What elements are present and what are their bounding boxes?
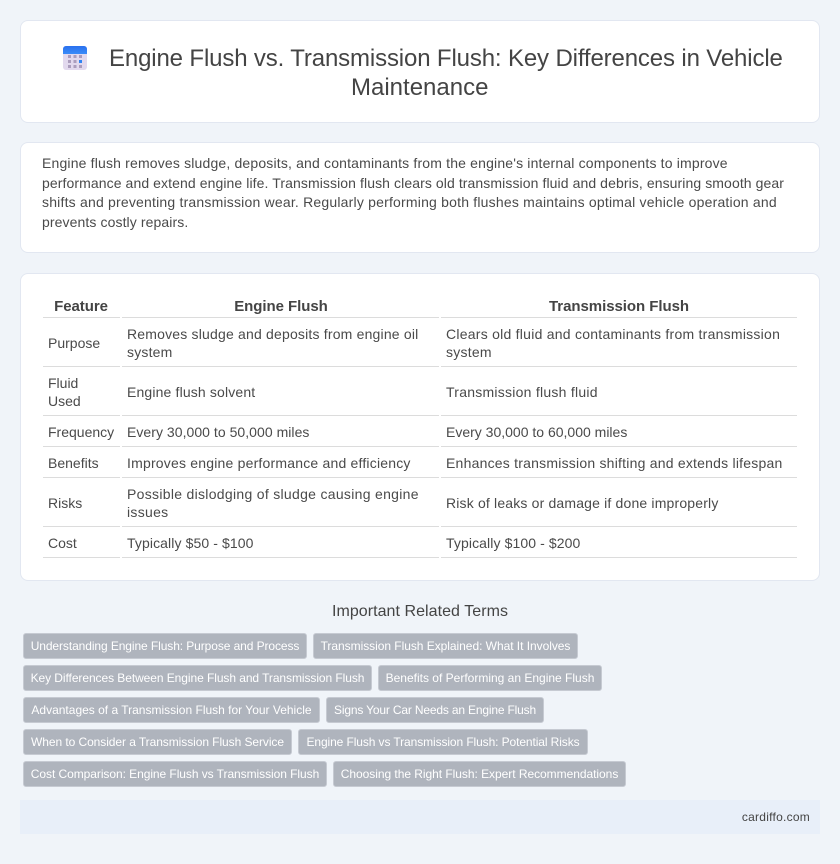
tag <box>333 761 626 787</box>
row: fluid used <box>48 375 598 409</box>
row: benefits: Enhances transmission shifting and extends lifespan <box>446 455 783 471</box>
row: cost <box>48 535 580 551</box>
row: benefits <box>48 455 783 471</box>
panel: comparison table <box>20 273 820 581</box>
tag <box>23 633 307 659</box>
tag <box>23 729 292 755</box>
row: frequency <box>48 424 627 440</box>
tag: Understanding Engine Flush: Purpose and Process <box>31 639 299 653</box>
row: purpose <box>48 326 780 360</box>
row: purpose: Removes sludge and deposits from engine oil <box>127 326 418 342</box>
table header: Transmission Flush <box>549 298 689 315</box>
row: risks: Risks <box>48 495 82 511</box>
tag <box>378 665 602 691</box>
text block: intro: performance and extend engine life. Transmission flush clears old transmission fluid and debris, ensuring smooth gear <box>42 175 784 191</box>
row: purpose: Purpose <box>48 335 100 351</box>
row: purpose: Clears old fluid and contaminants from transmission <box>446 326 780 342</box>
tag <box>326 697 544 723</box>
tag: Key Differences Between Engine Flush and Transmission Flush <box>31 671 364 685</box>
row: frequency: Frequency <box>48 424 114 440</box>
row: cost: Cost <box>48 535 77 551</box>
row: benefits: Benefits <box>48 455 99 471</box>
text block: intro: shifts and preventing transmission wear. Regularly performing both flushes maintains optimal vehicle operation and <box>42 194 777 210</box>
tag: Choosing the Right Flush: Expert Recommendations <box>341 767 618 781</box>
tag: Benefits of Performing an Engine Flush <box>386 671 594 685</box>
icon: calendar <box>63 46 87 70</box>
row: frequency: Every 30,000 to 60,000 miles <box>446 424 627 440</box>
tag <box>23 761 327 787</box>
title: Maintenance <box>351 74 488 101</box>
tag: Engine Flush vs Transmission Flush: Potential Risks <box>306 735 580 749</box>
row: purpose: system <box>127 344 172 360</box>
title <box>109 45 783 101</box>
row: fluid used: Fluid <box>48 375 78 391</box>
row: cost: Typically $100 - $200 <box>446 535 580 551</box>
row: cost: Typically $50 - $100 <box>127 535 254 551</box>
text block: intro: Engine flush removes sludge, deposits, and contaminants from the engine's internal components to improve <box>42 155 728 171</box>
row: purpose: system <box>446 344 492 360</box>
tags: related terms <box>23 633 626 787</box>
row: fluid used: Engine flush solvent <box>127 384 255 400</box>
panel: intro text <box>20 142 820 253</box>
tag: Transmission Flush Explained: What It Involves <box>321 639 570 653</box>
tag <box>298 729 588 755</box>
tag <box>313 633 578 659</box>
text block: intro <box>42 155 784 230</box>
panel: header <box>20 20 820 123</box>
row: fluid used: Used <box>48 393 81 409</box>
table header: Engine Flush <box>234 298 328 315</box>
tag <box>23 697 320 723</box>
tag: Cost Comparison: Engine Flush vs Transmission Flush <box>31 767 319 781</box>
row: fluid used: Transmission flush fluid <box>446 384 598 400</box>
footer text: cardiffo.com <box>742 810 810 824</box>
row: frequency: Every 30,000 to 50,000 miles <box>127 424 309 440</box>
tag: Signs Your Car Needs an Engine Flush <box>334 703 536 717</box>
row: risks: issues <box>127 504 168 520</box>
row: benefits: Improves engine performance and efficiency <box>127 455 411 471</box>
table header <box>54 298 689 315</box>
tag: Advantages of a Transmission Flush for Your Vehicle <box>31 703 312 717</box>
heading: related terms: Important Related Terms <box>332 603 508 620</box>
row: risks <box>48 486 718 520</box>
row: risks: Risk of leaks or damage if done improperly <box>446 495 718 511</box>
text block: intro: prevents costly repairs. <box>42 214 188 230</box>
title: Engine Flush vs. Transmission Flush: Key Differences in Vehicle <box>109 45 783 72</box>
row: risks: Possible dislodging of sludge causing engine <box>127 486 419 502</box>
tag <box>23 665 372 691</box>
table header: Feature <box>54 298 108 315</box>
footer <box>20 800 820 834</box>
tag: When to Consider a Transmission Flush Service <box>31 735 284 749</box>
